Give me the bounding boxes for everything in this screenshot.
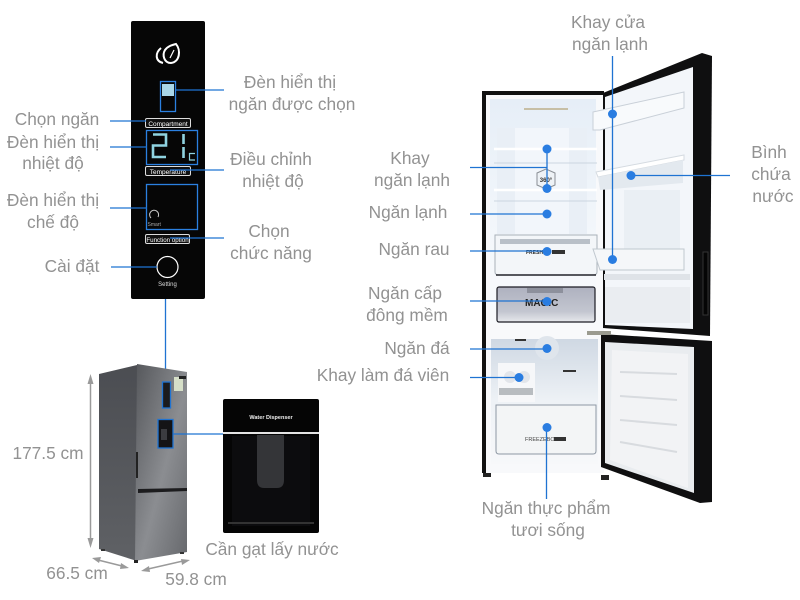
illustration: water dispenser: Water Dispenser <box>249 415 293 421</box>
temperature button: Temperature <box>150 169 187 176</box>
dispenser marker <box>158 420 173 448</box>
panel: control panel <box>131 21 205 299</box>
label: water tank: chứa <box>751 164 791 184</box>
callout lines: control panel <box>110 90 224 382</box>
illustration: water dispenser <box>223 399 319 533</box>
label: mode light: chế độ <box>27 212 79 232</box>
freezer drawer <box>496 405 596 454</box>
dimension arrows <box>88 374 190 572</box>
compartment indicator <box>160 82 176 112</box>
compartment button: Compartment <box>148 121 188 128</box>
label: height: 177.5 cm <box>12 443 84 463</box>
label: soft freeze: Ngăn cấp <box>368 283 442 303</box>
label: adjust temperature: nhiệt độ <box>242 171 304 191</box>
mode display <box>146 184 198 230</box>
label: function select: Chọn <box>248 221 290 241</box>
label: ice tray: Khay làm đá viên <box>317 365 449 385</box>
setting button <box>157 256 178 288</box>
temperature button <box>146 166 190 176</box>
label: adjust temperature: Điều chỉnh <box>230 149 312 169</box>
label: fresh food: tươi sống <box>511 520 585 540</box>
hinge <box>587 331 611 335</box>
label: fridge tray: ngăn lạnh <box>374 170 450 190</box>
function option button: Function option <box>146 237 189 244</box>
upper door <box>593 53 712 336</box>
fresh drawer: FRESH <box>526 250 543 256</box>
label: depth: 66.5 cm <box>46 563 108 583</box>
illustration: closed fridge <box>99 364 187 563</box>
illustration: open fridge <box>482 53 712 503</box>
label: select compartment: Chọn ngăn <box>15 109 99 129</box>
label: function select: chức năng <box>230 243 312 263</box>
magic drawer <box>497 287 595 322</box>
label: ice compartment: Ngăn đá <box>384 338 450 358</box>
freezer compartment <box>491 336 598 464</box>
lower door <box>601 334 712 503</box>
label: vegetable drawer: Ngăn rau <box>378 239 450 259</box>
label: freezer door tray: ngăn lạnh <box>572 34 648 54</box>
magic drawer: MAGIC <box>525 298 558 309</box>
label: settings: Cài đặt <box>45 256 100 276</box>
label: temperature light: Đèn hiển thị <box>7 132 99 152</box>
front panel marker <box>162 382 170 408</box>
label: cool compartment: Ngăn lạnh <box>369 202 447 222</box>
fresh drawer <box>495 235 597 275</box>
label: freezer door tray: Khay cửa <box>571 12 645 32</box>
label: water tank: Bình <box>751 142 787 162</box>
label: width: 59.8 cm <box>165 569 227 589</box>
cabinet: 360° <box>540 178 553 184</box>
label: fresh food: Ngăn thực phẩm <box>482 498 610 518</box>
freezer drawer: FREEZEBOX <box>525 437 559 443</box>
cabinet <box>482 91 609 480</box>
callout dots <box>514 110 636 432</box>
label: selected compartment light: Đèn hiển thị <box>244 72 336 92</box>
compartment button <box>146 118 190 128</box>
setting button: Setting <box>158 282 177 288</box>
icon: leaf logo <box>157 44 179 63</box>
label: mode light: Đèn hiển thị <box>7 190 99 210</box>
label: dispenser lever: Cần gạt lấy nước <box>205 539 339 559</box>
label: fridge tray: Khay <box>390 148 430 168</box>
line to dispenser <box>173 433 223 435</box>
mode display: Smart <box>148 222 161 228</box>
label: soft freeze: đông mềm <box>366 305 448 325</box>
label: selected compartment light: ngăn được chọn <box>229 94 355 114</box>
temperature display <box>146 130 198 164</box>
callout lines: open fridge <box>470 56 730 499</box>
label: water tank: nước <box>752 186 794 206</box>
label: temperature light: nhiệt độ <box>22 153 84 173</box>
